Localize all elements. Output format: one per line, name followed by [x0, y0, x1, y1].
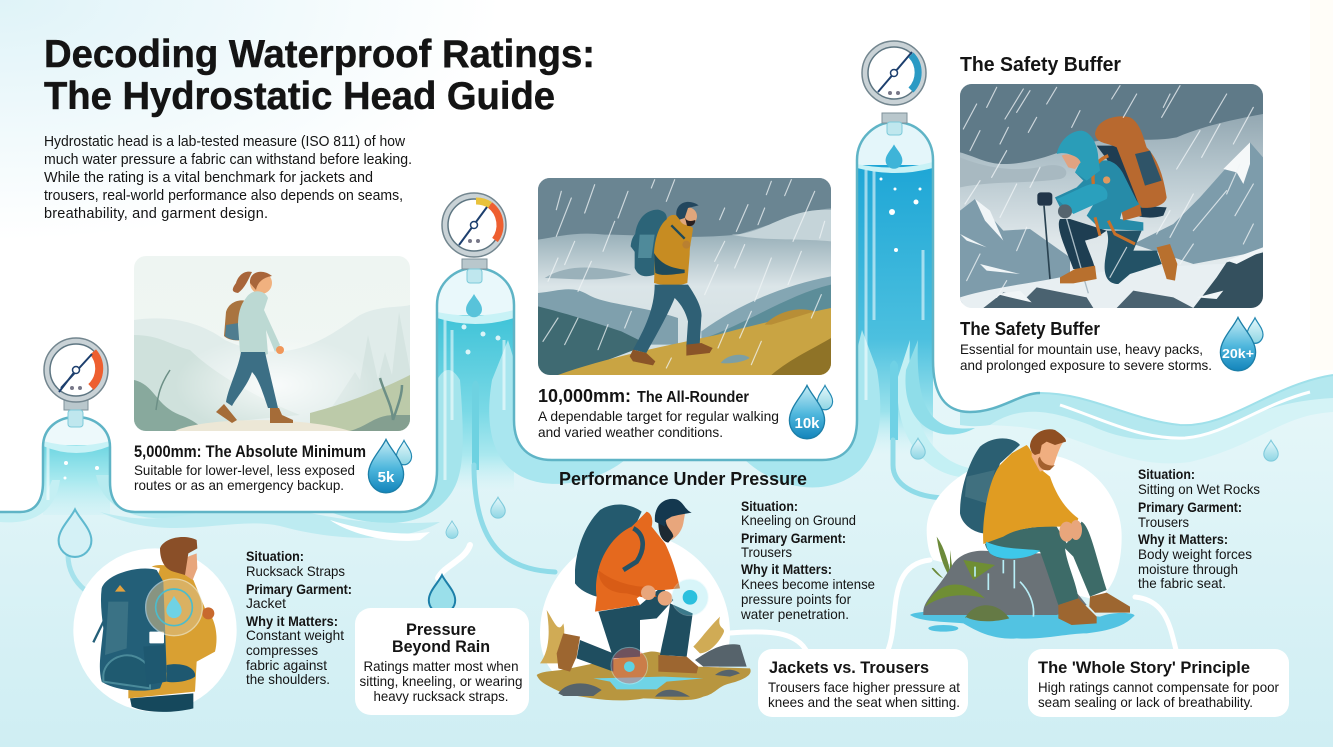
- title: [44, 33, 595, 118]
- kneeling details: pressure points for: [741, 591, 851, 607]
- card: pressure beyond rain: heavy rucksack straps.: [374, 688, 508, 704]
- rucksack straps details: Constant weight: [246, 627, 344, 643]
- 10,000mm text: [538, 385, 779, 440]
- kneeling details: Kneeling on Ground: [741, 512, 856, 528]
- connector streams: [68, 440, 1176, 650]
- panel: 10,000mm image: [538, 178, 831, 375]
- intro text: [44, 134, 412, 222]
- card: whole story principle: High ratings cannot compensate for poor: [1038, 679, 1279, 695]
- heading: performance under pressure: Performance Under Pressure: [559, 468, 807, 489]
- icon: 10k badge: [789, 385, 833, 439]
- sitting details: Trousers: [1138, 514, 1189, 530]
- rucksack straps details: compresses: [246, 642, 318, 658]
- 10,000mm text: The All-Rounder: [637, 389, 749, 406]
- safety buffer text: and prolonged exposure to severe storms.: [960, 357, 1212, 373]
- intro text: While the rating is a vital benchmark for jackets and: [44, 170, 373, 186]
- sitting details: Primary Garment:: [1138, 499, 1242, 515]
- rucksack straps details: Jacket: [246, 595, 286, 611]
- 5,000mm text: Suitable for lower-level, less exposed: [134, 462, 355, 478]
- illustration: kneeling hiker: [537, 499, 751, 700]
- panel: safety buffer image: [960, 84, 1263, 308]
- safety buffer text: The Safety Buffer: [960, 319, 1100, 339]
- sitting details: the fabric seat.: [1138, 575, 1226, 591]
- icon: 5k badge: 5k: [378, 469, 395, 486]
- kneeling details: Primary Garment:: [741, 530, 846, 546]
- intro text: much water pressure a fabric can withstand before leaking.: [44, 152, 412, 168]
- rucksack straps details: the shoulders.: [246, 671, 330, 687]
- icon: 20k+ badge: [1220, 317, 1263, 371]
- illustration: hiker with rucksack: [73, 537, 237, 712]
- safety buffer text: [960, 319, 1212, 373]
- rucksack straps details: Rucksack Straps: [246, 563, 345, 579]
- 10,000mm text: and varied weather conditions.: [538, 424, 723, 440]
- intro text: trousers, real-world performance also depends on seams,: [44, 188, 403, 204]
- 10,000mm text: A dependable target for regular walking: [538, 408, 779, 424]
- card: jackets vs trousers: knees and the seat when sitting.: [768, 694, 960, 710]
- icon: 10k badge: 10k: [794, 415, 820, 432]
- sitting details: Body weight forces: [1138, 546, 1252, 562]
- intro text: Hydrostatic head is a lab-tested measure (ISO 811) of how: [44, 134, 406, 150]
- kneeling details: water penetration.: [740, 606, 849, 622]
- card: jackets vs trousers: Jackets vs. Trousers: [769, 658, 929, 677]
- icon: pressure drop: [429, 575, 455, 613]
- card: pressure beyond rain: [355, 608, 529, 715]
- walker: [630, 202, 713, 365]
- rucksack straps details: Situation:: [246, 548, 304, 564]
- title: The Hydrostatic Head Guide: [44, 75, 555, 118]
- card: pressure beyond rain: Beyond Rain: [392, 637, 490, 656]
- kneeling details: Trousers: [741, 544, 792, 560]
- intro text: breathability, and garment design.: [44, 206, 268, 222]
- rucksack straps details: [246, 548, 352, 687]
- safety buffer text: Essential for mountain use, heavy packs,: [960, 341, 1203, 357]
- rucksack straps details: fabric against: [246, 657, 327, 673]
- gauge 3: [862, 41, 926, 135]
- 5,000mm text: [134, 442, 366, 493]
- card: whole story principle: seam sealing or lack of breathability.: [1038, 694, 1253, 710]
- sitting details: Situation:: [1138, 466, 1195, 482]
- card: whole story principle: The 'Whole Story' Principle: [1038, 658, 1250, 677]
- card: jackets vs trousers: [758, 649, 968, 717]
- tube highlights: [48, 170, 923, 500]
- icon: 5k badge: [368, 439, 412, 493]
- 5,000mm text: 5,000mm: The Absolute Minimum: [134, 442, 366, 461]
- illustration: seated hiker: [910, 429, 1134, 639]
- sitting details: Why it Matters:: [1138, 531, 1228, 547]
- sitting details: Sitting on Wet Rocks: [1138, 481, 1260, 497]
- hiker: [216, 272, 293, 423]
- card: pressure beyond rain: Pressure: [406, 620, 476, 639]
- rucksack straps details: Why it Matters:: [246, 613, 338, 629]
- gauge 2: [442, 193, 506, 283]
- kneeling details: Situation:: [741, 498, 798, 514]
- sitting details: [1138, 466, 1260, 591]
- icons: loose water drops: [59, 144, 1278, 557]
- card: whole story principle: [1028, 649, 1289, 717]
- card: jackets vs trousers: Trousers face higher pressure at: [768, 679, 960, 695]
- title: Decoding Waterproof Ratings:: [44, 33, 595, 76]
- 5,000mm text: routes or as an emergency backup.: [134, 477, 344, 493]
- card: pressure beyond rain: sitting, kneeling, or wearing: [360, 673, 522, 689]
- gauge 1: [44, 338, 108, 427]
- 10,000mm text: 10,000mm:: [538, 385, 631, 406]
- kneeling details: [740, 498, 875, 622]
- top heading: safety buffer: The Safety Buffer: [960, 53, 1121, 76]
- tube interiors above water: [45, 419, 108, 445]
- sitting details: moisture through: [1138, 561, 1238, 577]
- icon: 20k+ badge: 20k+: [1222, 346, 1254, 361]
- climber: [1037, 116, 1177, 293]
- panel: 5,000mm image: [134, 256, 410, 435]
- kneeling details: Knees become intense: [741, 576, 875, 592]
- card: pressure beyond rain: Ratings matter most when: [364, 658, 518, 674]
- rucksack straps details: Primary Garment:: [246, 581, 352, 597]
- kneeling details: Why it Matters:: [741, 561, 832, 577]
